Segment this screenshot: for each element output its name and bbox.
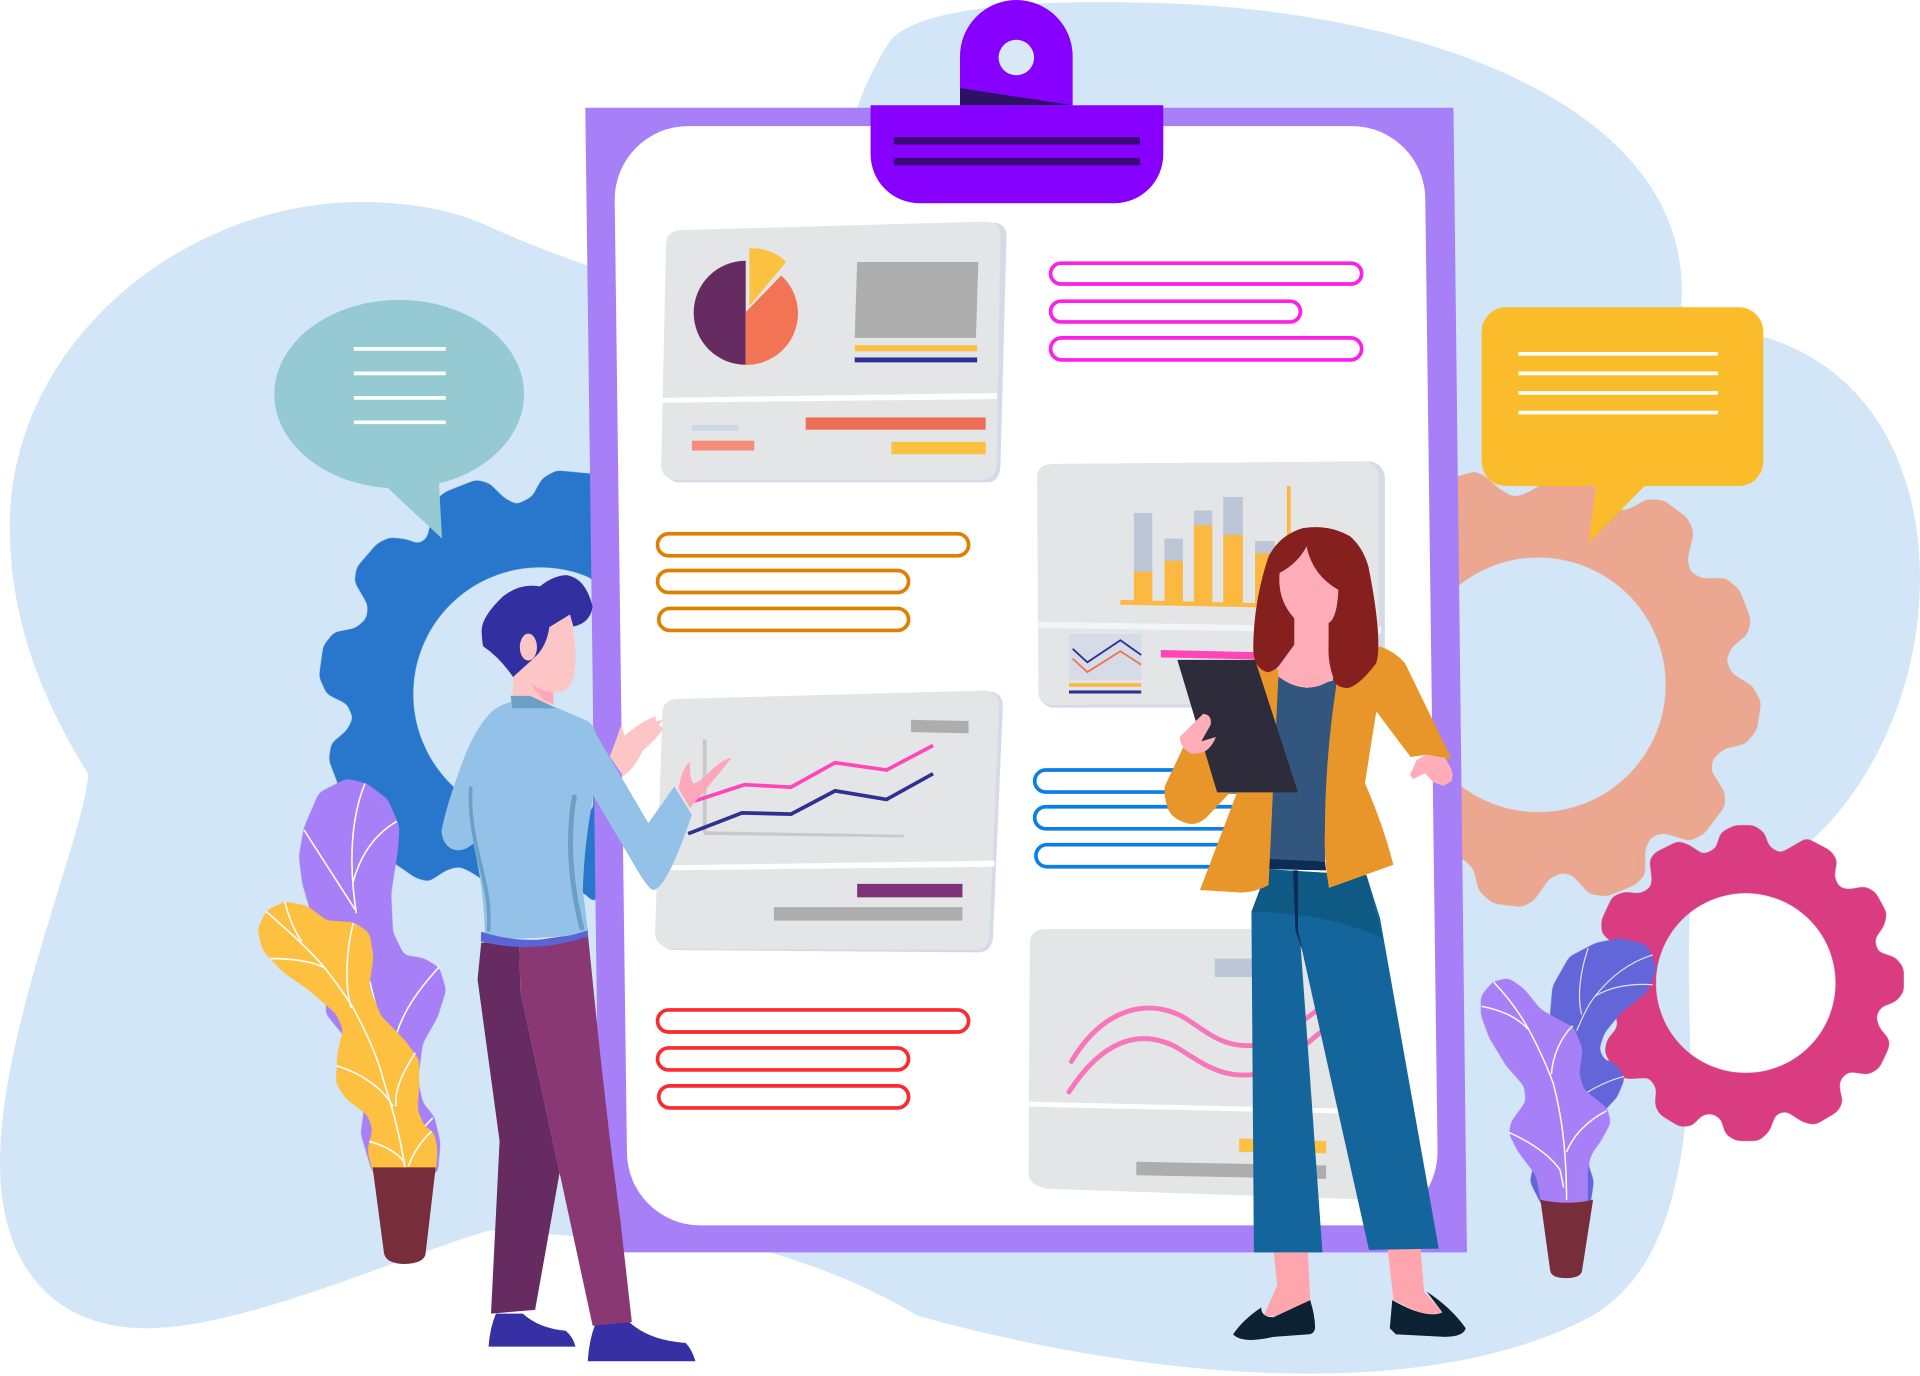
text lines: orange <box>658 534 969 630</box>
woman holding clipboard <box>1165 527 1466 1340</box>
line chart <box>688 746 933 834</box>
jeans <box>1251 869 1439 1252</box>
hair and face <box>1253 527 1378 688</box>
clipboard board <box>585 108 1467 1252</box>
panel: wave chart card <box>1029 929 1371 1200</box>
shoes <box>489 1314 696 1361</box>
mini line chart <box>1069 634 1141 694</box>
panel: bar chart card <box>1037 462 1385 708</box>
speech bubble: teal <box>274 300 524 539</box>
jacket <box>1165 646 1452 892</box>
plant: left <box>258 780 445 1264</box>
head <box>482 575 593 705</box>
text lines: magenta <box>1051 263 1362 360</box>
man presenting <box>441 575 732 1361</box>
pie chart <box>694 248 798 365</box>
bar chart <box>1120 486 1322 608</box>
text lines: blue <box>1035 770 1346 867</box>
pot: left <box>373 1167 436 1264</box>
hands <box>610 716 732 808</box>
top <box>1268 675 1337 861</box>
belt <box>1267 859 1326 870</box>
plant: right <box>1482 939 1656 1278</box>
legs <box>1264 1246 1442 1316</box>
panel: pie chart card <box>661 222 1007 482</box>
icon: salmon gear <box>1410 473 1760 906</box>
speech bubble: yellow <box>1482 307 1763 544</box>
shirt <box>441 696 692 947</box>
icon: blue gear <box>321 472 669 901</box>
trousers <box>478 933 632 1326</box>
shoes <box>1233 1292 1466 1340</box>
text lines: red <box>658 1010 969 1108</box>
right hand <box>1410 755 1453 786</box>
panel: line chart card <box>655 690 1003 952</box>
wave chart <box>1069 1006 1322 1092</box>
left hand <box>1180 714 1216 754</box>
icon: pink gear <box>1592 826 1903 1140</box>
pot: right <box>1540 1200 1593 1278</box>
held clipboard <box>1177 660 1298 792</box>
clipboard clip <box>871 0 1163 203</box>
